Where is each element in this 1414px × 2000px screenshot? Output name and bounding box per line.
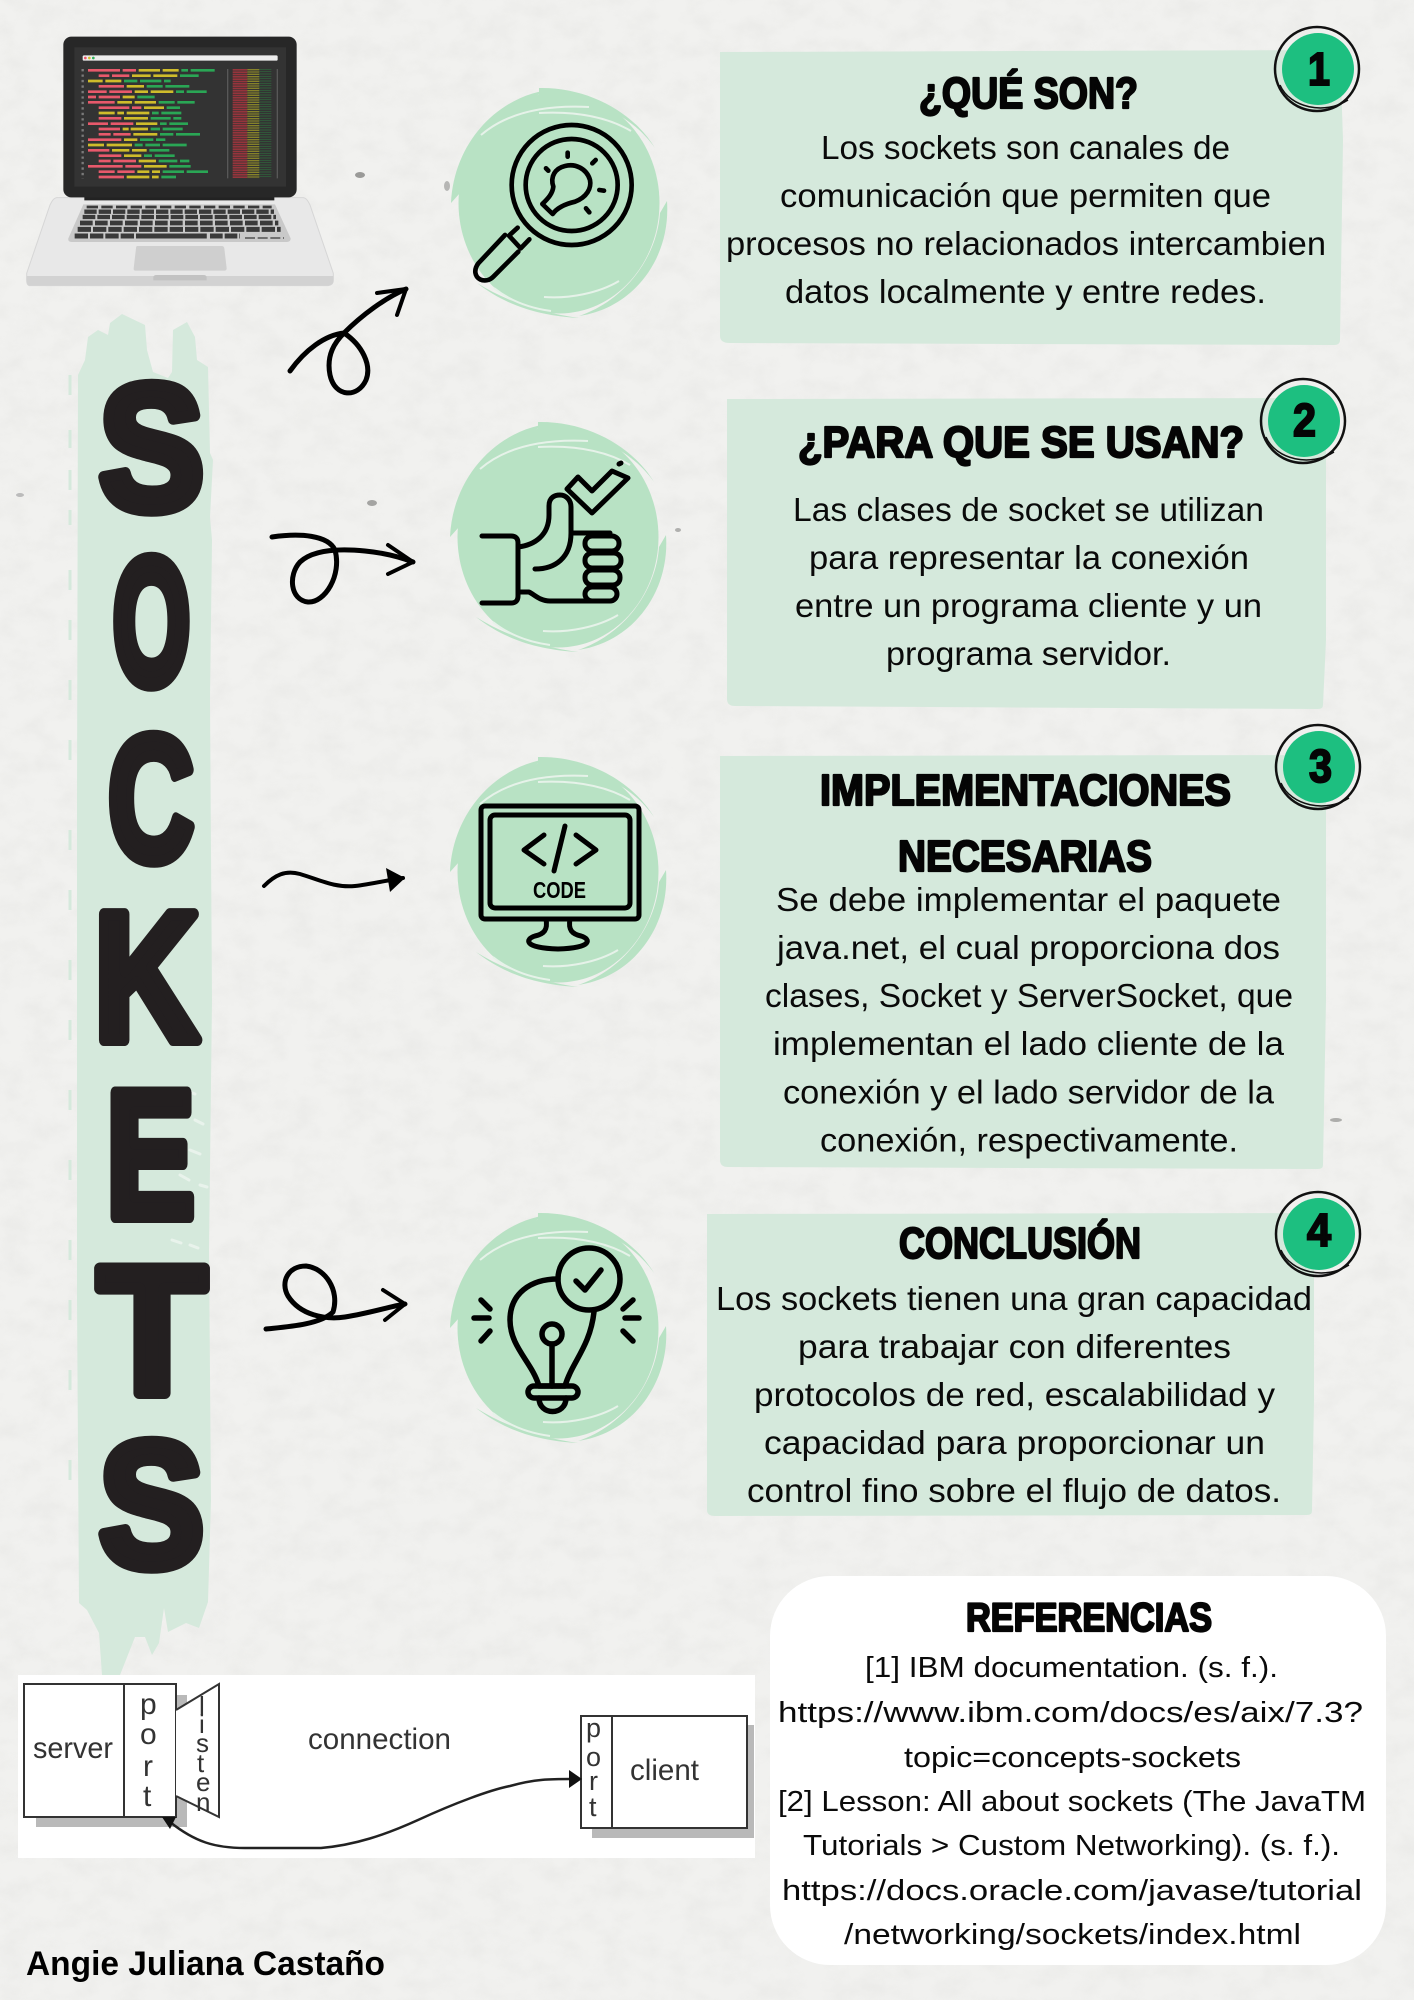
listen wedge: l bbox=[199, 1691, 205, 1721]
client box: r bbox=[589, 1766, 598, 1796]
heading 3 bbox=[820, 766, 1231, 881]
letter S: S bbox=[99, 348, 204, 547]
body 2: programa servidor. bbox=[886, 635, 1171, 672]
body 2: entre un programa cliente y un bbox=[795, 587, 1262, 624]
panel: client server diagram bbox=[18, 1675, 755, 1858]
server box: o bbox=[140, 1718, 157, 1751]
connection curve arrow bbox=[162, 1770, 582, 1848]
body 3: conexión y el lado servidor de la bbox=[783, 1074, 1275, 1110]
references list: /networking/sockets/index.html bbox=[844, 1919, 1301, 1951]
icon: thumbs up bbox=[450, 422, 666, 652]
client box: client bbox=[630, 1754, 700, 1787]
heading 3: IMPLEMENTACIONES bbox=[820, 766, 1231, 815]
body 1: procesos no relacionados intercambien bbox=[726, 225, 1326, 262]
number badge 2: 2 bbox=[1293, 394, 1316, 446]
panel 1: qué son bbox=[720, 50, 1343, 345]
server box: server bbox=[33, 1732, 113, 1765]
number badge 4 bbox=[1276, 1192, 1360, 1276]
listen wedge: e bbox=[196, 1767, 210, 1797]
letter K: K bbox=[94, 874, 199, 1079]
number badge 1: 1 bbox=[1308, 43, 1330, 95]
references list: https://www.ibm.com/docs/es/aix/7.3? bbox=[778, 1697, 1363, 1729]
references heading: REFERENCIAS bbox=[966, 1596, 1212, 1640]
body 3: java.net, el cual proporciona dos bbox=[776, 929, 1280, 966]
icon: magnifier with bulb bbox=[451, 88, 667, 318]
server box bbox=[24, 1684, 187, 1827]
references list: [2] Lesson: All about sockets (The JavaTM bbox=[778, 1786, 1366, 1818]
references list: https://docs.oracle.com/javase/tutorial bbox=[782, 1875, 1362, 1907]
listen wedge: s bbox=[196, 1728, 209, 1758]
client box: p bbox=[586, 1713, 601, 1743]
arrow 2 bbox=[272, 535, 413, 602]
body 3: implementan el lado cliente de la bbox=[773, 1025, 1285, 1062]
body 2 bbox=[793, 491, 1264, 672]
body 4 bbox=[716, 1280, 1312, 1509]
body 3: conexión, respectivamente. bbox=[820, 1122, 1238, 1158]
letter E: E bbox=[106, 1054, 195, 1256]
server box: t bbox=[143, 1780, 152, 1813]
references list: Tutorials > Custom Networking). (s. f.). bbox=[803, 1830, 1340, 1862]
letter O: O bbox=[113, 522, 190, 721]
heading 3: NECESARIAS bbox=[898, 832, 1152, 881]
title strip: SOCKETS bbox=[70, 314, 213, 1675]
connection label: connection bbox=[308, 1723, 451, 1756]
arrow 1 bbox=[290, 289, 406, 393]
number badge 4: 4 bbox=[1307, 1204, 1331, 1256]
client box bbox=[581, 1713, 754, 1838]
letter T: T bbox=[98, 1230, 206, 1432]
listen wedge: n bbox=[196, 1787, 210, 1817]
body 3 bbox=[765, 881, 1293, 1158]
arrow 4 bbox=[266, 1266, 405, 1329]
body 3: clases, Socket y ServerSocket, que bbox=[765, 977, 1293, 1014]
letter S: S bbox=[99, 1405, 204, 1604]
number badge 2 bbox=[1261, 379, 1345, 463]
body 4: para trabajar con diferentes bbox=[798, 1328, 1231, 1365]
panel 2: para que se usan bbox=[727, 398, 1326, 709]
body 1: Los sockets son canales de bbox=[821, 129, 1230, 166]
body 4: control fino sobre el flujo de datos. bbox=[747, 1472, 1281, 1509]
icon: laptop bbox=[27, 37, 333, 286]
letter C: C bbox=[108, 699, 194, 898]
body 1: datos localmente y entre redes. bbox=[785, 273, 1266, 310]
references list: topic=concepts-sockets bbox=[904, 1742, 1241, 1774]
panel: referencias bbox=[770, 1576, 1386, 1965]
client box: o bbox=[586, 1742, 601, 1772]
heading 2: ¿PARA QUE SE USAN? bbox=[798, 418, 1244, 467]
body 4: capacidad para proporcionar un bbox=[764, 1424, 1265, 1461]
listen wedge: i bbox=[199, 1709, 205, 1739]
number badge 3: 3 bbox=[1309, 740, 1332, 792]
listen wedge bbox=[176, 1684, 219, 1817]
client box: t bbox=[589, 1792, 597, 1822]
icon: light bulb with check bbox=[450, 1213, 666, 1443]
panel 3: implementaciones necesarias bbox=[720, 755, 1326, 1169]
heading 4: CONCLUSIÓN bbox=[899, 1218, 1141, 1268]
body 4: protocolos de red, escalabilidad y bbox=[754, 1376, 1276, 1413]
panel 4: conclusión bbox=[707, 1213, 1314, 1516]
references list bbox=[778, 1652, 1366, 1951]
body 2: para representar la conexión bbox=[809, 539, 1249, 576]
author credit: Angie Juliana Castaño bbox=[26, 1945, 385, 1983]
body 4: Los sockets tienen una gran capacidad bbox=[716, 1280, 1312, 1317]
heading 1: ¿QUÉ SON? bbox=[919, 68, 1138, 118]
body 1: comunicación que permiten que bbox=[780, 177, 1271, 214]
arrow 3 bbox=[264, 868, 405, 892]
icon: code monitor bbox=[450, 757, 666, 987]
number badge 3 bbox=[1276, 725, 1360, 809]
body 3: Se debe implementar el paquete bbox=[776, 881, 1281, 918]
server box: r bbox=[143, 1750, 153, 1783]
listen wedge: t bbox=[197, 1748, 205, 1778]
label: CODE: CODE bbox=[533, 877, 586, 903]
server box: p bbox=[140, 1688, 157, 1721]
number badge 1 bbox=[1275, 27, 1359, 111]
body 2: Las clases de socket se utilizan bbox=[793, 491, 1264, 528]
body 1 bbox=[726, 129, 1326, 310]
references list: [1] IBM documentation. (s. f.). bbox=[865, 1652, 1278, 1684]
